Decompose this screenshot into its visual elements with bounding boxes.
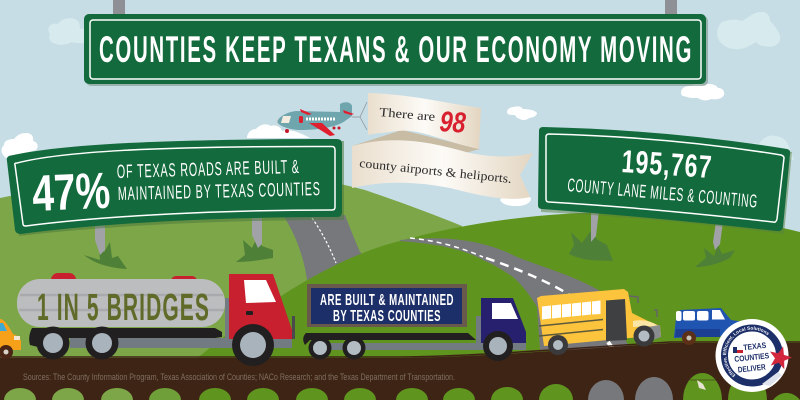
road: far road (283, 215, 372, 280)
badge: Texas Counties Deliver: DELIVER (737, 363, 766, 374)
bridge deck (0, 343, 800, 400)
light green hill (0, 172, 462, 400)
banner fold (352, 130, 480, 153)
blue SUV (674, 308, 756, 345)
banner top (368, 93, 481, 149)
door (606, 299, 627, 341)
title sign (84, 14, 708, 86)
grass tuft 4 (695, 245, 735, 267)
grass tuft 2 (236, 235, 273, 262)
billboard text: ARE BUILT & MAINTAINED (320, 292, 454, 309)
road: near curving road (400, 238, 628, 350)
flatbed truck: BY TEXAS COUNTIES (333, 308, 441, 325)
banner (352, 93, 533, 199)
cloud: by banner (500, 196, 531, 206)
tank text: 1 IN 5 BRIDGES (37, 287, 210, 329)
47%: 47% (31, 162, 111, 222)
wheels (36, 324, 274, 366)
flag (733, 347, 737, 353)
mirrors (629, 296, 657, 317)
ring text (726, 330, 770, 375)
banner bottom (352, 140, 533, 199)
tow ropes (352, 102, 367, 130)
banner: 98 (439, 106, 467, 140)
cloud: behind plane (247, 124, 310, 138)
star (770, 346, 792, 369)
badge: Texas Counties Deliver: Effective, Efficient, Local Solutions (722, 326, 769, 378)
banner: county airports & heliports. (359, 156, 512, 186)
dark green hill (195, 212, 800, 400)
tanker truck (17, 273, 295, 366)
sources: Sources: The County Information Program, Texas Association of Counties; NACo Research; and the Texas Department of Transportation. (23, 372, 455, 382)
billboard (307, 284, 467, 327)
cloud: top left (48, 18, 94, 45)
sign posts (95, 0, 723, 255)
grass tuft 1 (84, 240, 127, 269)
road dash by bus (608, 342, 613, 349)
chassis (29, 328, 222, 348)
bridge rail (0, 342, 800, 357)
grass tuft 3 (569, 232, 613, 261)
badge: Texas Counties Deliver (716, 319, 792, 392)
cloud: small (507, 106, 537, 120)
banner text: There are (379, 105, 436, 124)
badge words: TEXAS (743, 341, 767, 352)
badge: Texas Counties Deliver: COUNTIES (734, 351, 770, 364)
cloud: top right (717, 12, 780, 49)
road dashes far (312, 218, 336, 263)
cab (229, 274, 292, 339)
airplane (277, 102, 367, 136)
cab (481, 298, 526, 343)
195,767: 195,767 (621, 143, 714, 185)
tank caps (51, 273, 76, 289)
cloud: behind right sign (748, 136, 794, 160)
cloud: left white (2, 133, 38, 158)
road dashes near (410, 238, 570, 295)
left sign text: OF TEXAS ROADS ARE BUILT & (117, 157, 300, 183)
bridge arches (4, 373, 800, 400)
tank (17, 279, 225, 327)
chicken under bridge (690, 380, 716, 390)
flatbed truck (303, 284, 526, 361)
cloud: under title sign (681, 84, 724, 100)
right sign: 195,767 (538, 127, 792, 234)
orange car (0, 319, 21, 359)
school bus (537, 289, 661, 355)
left sign: 47%: MAINTAINED BY TEXAS COUNTIES (118, 179, 321, 205)
left sign: 47% (7, 139, 344, 236)
windows (542, 300, 600, 320)
